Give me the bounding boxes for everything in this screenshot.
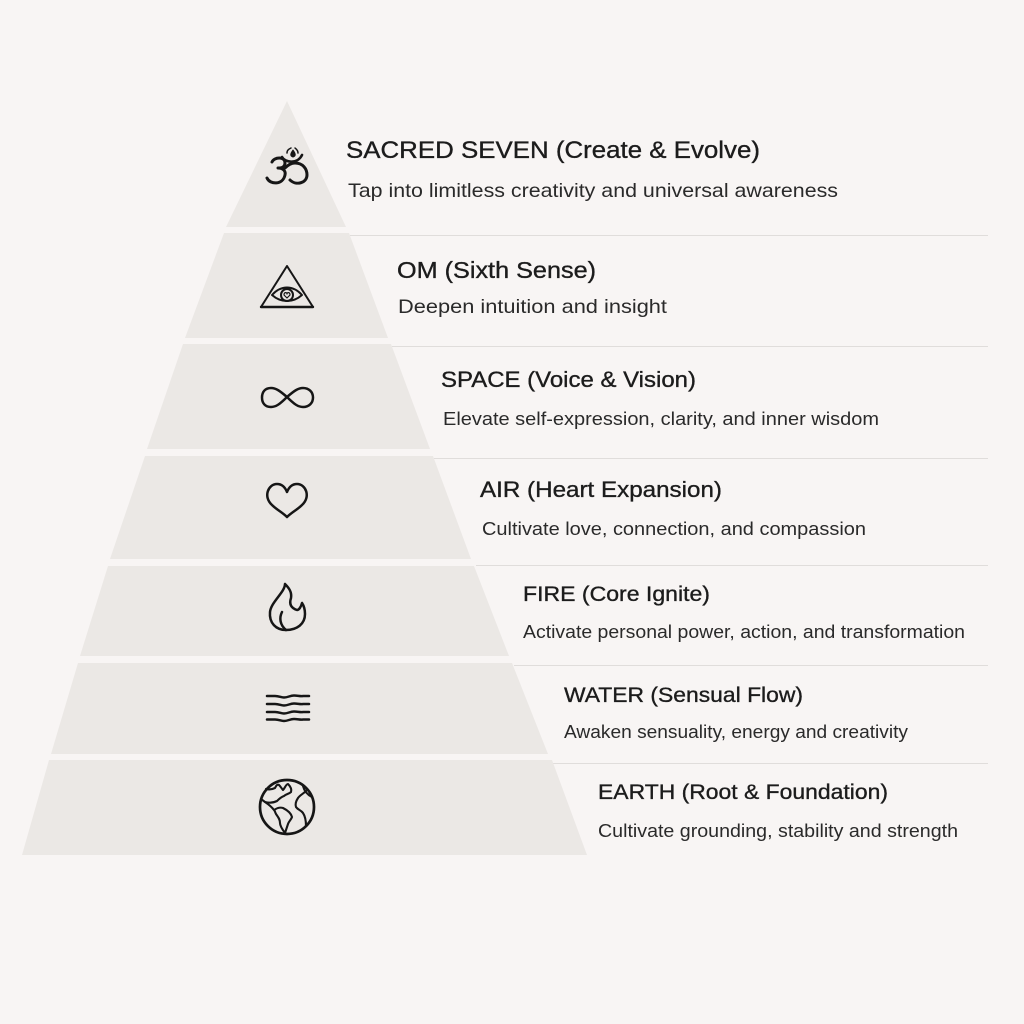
description: Cultivate grounding, stability and strength <box>598 821 958 841</box>
description: Deepen intuition and insight <box>398 296 668 318</box>
description: Awaken sensuality, energy and creativity <box>564 722 908 742</box>
label: space <box>441 367 879 429</box>
label: earth <box>598 781 958 841</box>
heading: WATER (Sensual Flow) <box>564 684 803 707</box>
label: air <box>480 477 866 539</box>
label: water <box>564 684 908 742</box>
icon: heart <box>267 484 307 517</box>
label: om <box>397 257 668 318</box>
tier 2: om <box>185 233 388 338</box>
heading: AIR (Heart Expansion) <box>480 477 722 502</box>
icon: earth <box>260 780 314 834</box>
pyramid <box>22 101 587 855</box>
heading: SPACE (Voice & Vision) <box>441 367 696 392</box>
heading: OM (Sixth Sense) <box>397 257 596 283</box>
icon: flame <box>270 584 305 630</box>
heading: FIRE (Core Ignite) <box>523 583 710 606</box>
icon: waves <box>267 696 309 721</box>
heading: EARTH (Root & Foundation) <box>598 781 888 804</box>
tier 3: space <box>147 344 430 449</box>
description: Activate personal power, action, and transformation <box>523 622 965 642</box>
tier 4: air <box>110 456 471 559</box>
description: Cultivate love, connection, and compassion <box>482 518 866 539</box>
icon: eye in triangle <box>261 266 313 307</box>
tier 5: fire <box>80 566 509 656</box>
description: Elevate self-expression, clarity, and inner wisdom <box>443 408 879 429</box>
tier 7: earth <box>22 760 587 855</box>
description: Tap into limitless creativity and universal awareness <box>348 180 838 202</box>
label: fire <box>523 583 965 642</box>
heading: SACRED SEVEN (Create & Evolve) <box>346 137 760 164</box>
tier 1: sacred seven <box>226 101 346 227</box>
icon: om <box>267 148 307 183</box>
tier 6: water <box>51 663 548 754</box>
icon: infinity <box>262 388 313 407</box>
label: sacred seven <box>346 137 838 202</box>
